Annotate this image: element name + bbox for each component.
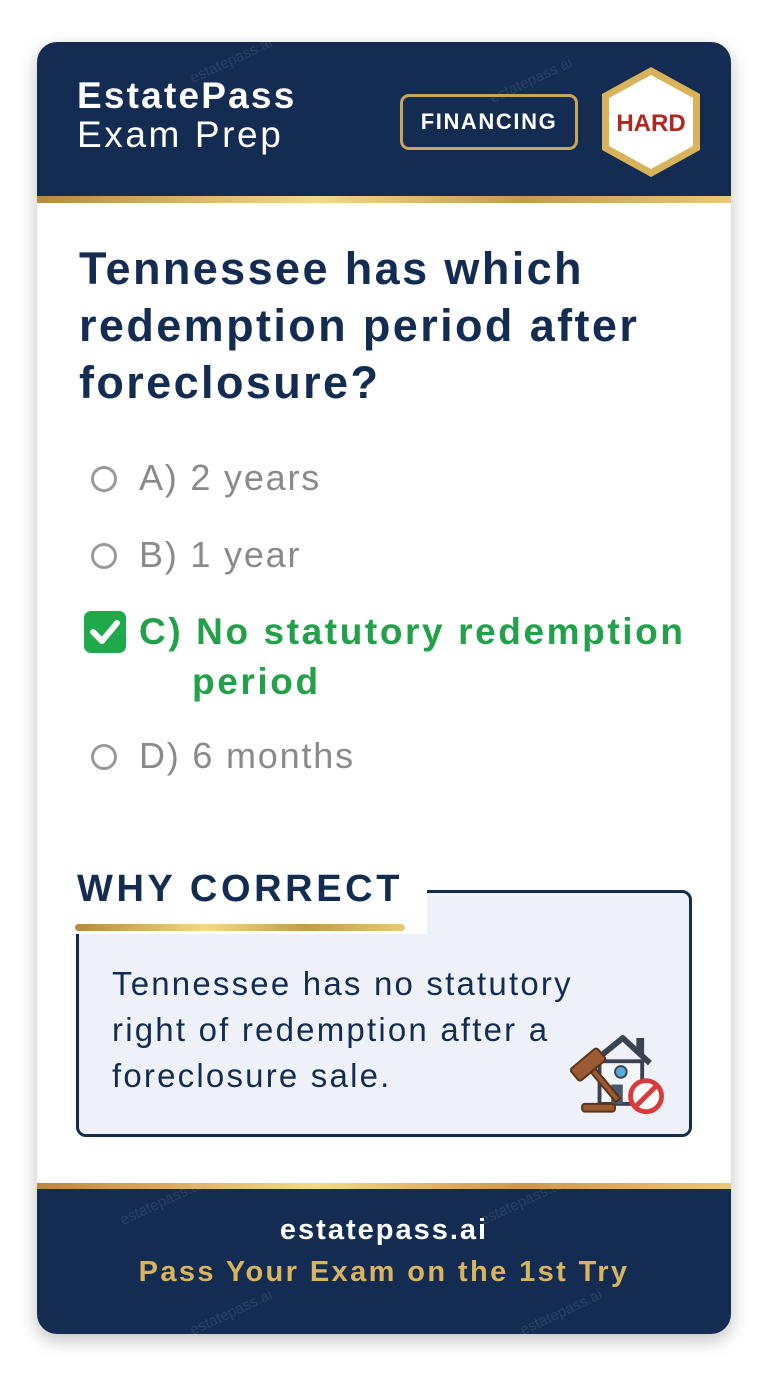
option C correct [84, 611, 686, 702]
question: Tennessee has which [79, 243, 584, 294]
footer: estatepass.ai [478, 1176, 565, 1229]
category badge [400, 94, 578, 150]
card: B) 1 year [139, 534, 301, 575]
option B [91, 534, 301, 575]
footer: estatepass.ai [118, 1176, 205, 1229]
brand title: Exam Prep [77, 114, 283, 155]
icon: gavel house no [570, 1035, 664, 1114]
card: D) 6 months [139, 735, 355, 776]
option A [91, 457, 321, 498]
option D [91, 735, 355, 776]
header [37, 42, 731, 196]
question: foreclosure? [79, 357, 380, 408]
footer url: estatepass.ai [280, 1214, 488, 1246]
card: period [192, 661, 321, 702]
explanation text: Tennessee has no statutory [112, 965, 573, 1002]
why correct box [76, 890, 692, 1137]
why correct heading [75, 864, 427, 934]
question [79, 243, 639, 408]
question: redemption period after [79, 300, 639, 351]
difficulty hexagon: HARD [616, 110, 686, 137]
why correct heading: WHY CORRECT [77, 868, 403, 910]
explanation text: right of redemption after a [112, 1011, 549, 1048]
card: A) 2 years [139, 457, 321, 498]
difficulty hexagon [602, 67, 700, 177]
brand title [77, 75, 296, 155]
header: estatepass.ai [488, 54, 575, 107]
category badge: FINANCING [421, 109, 557, 134]
explanation text: foreclosure sale. [112, 1057, 392, 1094]
footer tagline: Pass Your Exam on the 1st Try [139, 1256, 629, 1288]
brand title: EstatePass [77, 75, 296, 116]
explanation text [112, 965, 573, 1094]
card: C) No statutory redemption [139, 611, 686, 652]
footer [37, 1189, 731, 1334]
